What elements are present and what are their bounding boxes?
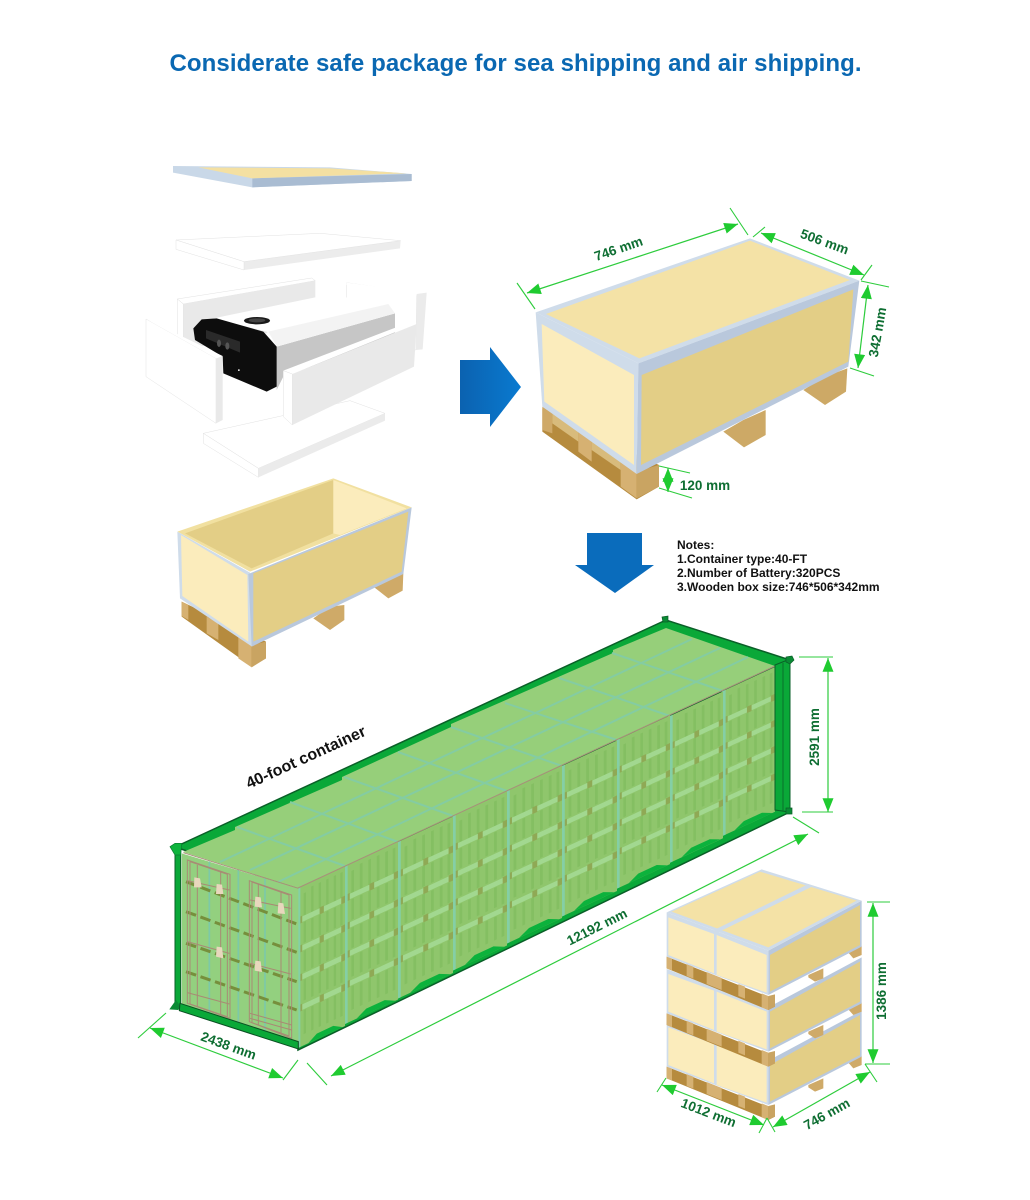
bottom foam slab xyxy=(203,401,385,477)
arrow: right xyxy=(460,347,521,427)
container front with doors xyxy=(169,843,298,1049)
notes: 1.Container type:40-FT xyxy=(677,552,808,566)
open wooden crate xyxy=(177,478,412,667)
title: Considerate safe package for sea shipping and air shipping. xyxy=(170,50,862,77)
container long side with cargo xyxy=(298,666,790,1050)
dimensions: container: 2438 mm xyxy=(199,1029,258,1063)
notes: 3.Wooden box size:746*506*342mm xyxy=(677,580,880,594)
dimensions: crate: 120 mm xyxy=(680,478,730,493)
crate body xyxy=(536,238,859,474)
pallet xyxy=(182,573,403,667)
notes: Notes: xyxy=(677,538,714,552)
notes: 2.Number of Battery:320PCS xyxy=(677,566,840,580)
dimensions: container xyxy=(138,657,833,1085)
dimensions: crate: 506 mm xyxy=(798,226,851,257)
dimensions: stack: 746 mm xyxy=(801,1095,852,1133)
dimensions: container: 2591 mm xyxy=(807,708,822,766)
container back post xyxy=(662,616,794,814)
bottom level xyxy=(667,1011,862,1120)
container top with cargo xyxy=(175,620,790,888)
middle level xyxy=(667,957,862,1067)
top level xyxy=(667,869,862,1010)
notes xyxy=(677,538,880,594)
stacked crates xyxy=(667,869,862,1120)
front foam walls xyxy=(146,319,417,425)
arrow: down xyxy=(575,533,654,593)
exploded packaging: foam and device xyxy=(146,166,427,477)
crate walls xyxy=(177,478,412,647)
wooden lid xyxy=(173,166,412,187)
top foam slab xyxy=(176,233,401,270)
dimensions: stack: 1386 mm xyxy=(874,962,889,1020)
back foam walls xyxy=(177,278,427,350)
dimensions: stack: 1012 mm xyxy=(679,1095,738,1130)
dimensions: crate xyxy=(517,208,889,498)
battery device xyxy=(193,295,395,392)
label: 40-foot container: 40-foot container xyxy=(244,723,369,793)
container corner post xyxy=(169,843,298,1049)
dimensions: crate: 746 mm xyxy=(592,233,645,264)
dimensions: crate: 342 mm xyxy=(866,306,889,358)
dimensions: container: 12192 mm xyxy=(564,906,630,948)
40-foot container xyxy=(169,616,794,1050)
closed wooden crate with pallet xyxy=(536,238,859,499)
dimensions: stack xyxy=(657,902,890,1133)
crate pallet xyxy=(542,368,847,499)
